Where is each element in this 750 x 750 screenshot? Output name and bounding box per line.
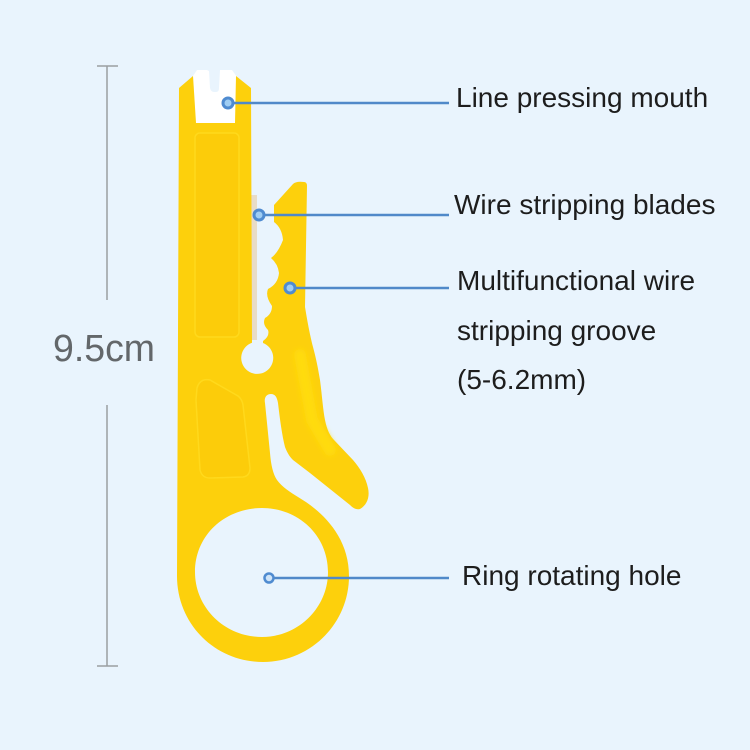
dimension: 9.5cm height [53, 66, 155, 666]
callout: ring rotating hole: Ring rotating hole [462, 560, 681, 591]
callout: ring rotating hole [264, 560, 681, 591]
lower grip recess [196, 380, 250, 478]
callout: wire stripping blades: Wire stripping blades [454, 189, 715, 220]
tool body [177, 76, 369, 662]
line pressing mouth insert [193, 70, 237, 123]
callout: multifunctional wire stripping groove: Multifunctional wire [457, 265, 695, 296]
callout: multifunctional wire stripping groove [285, 265, 695, 395]
upper grip recess [195, 133, 239, 337]
callout: wire stripping blades [254, 189, 715, 220]
callout: line pressing mouth: Line pressing mouth [456, 82, 708, 113]
callout: line pressing mouth [223, 82, 708, 113]
dimension: 9.5cm height: 9.5cm [53, 328, 155, 370]
wire stripper tool [177, 70, 369, 662]
lever highlight [300, 355, 330, 450]
blade [251, 195, 257, 340]
callout: multifunctional wire stripping groove: (5-6.2mm) [457, 364, 586, 395]
callout: multifunctional wire stripping groove: stripping groove [457, 315, 656, 346]
